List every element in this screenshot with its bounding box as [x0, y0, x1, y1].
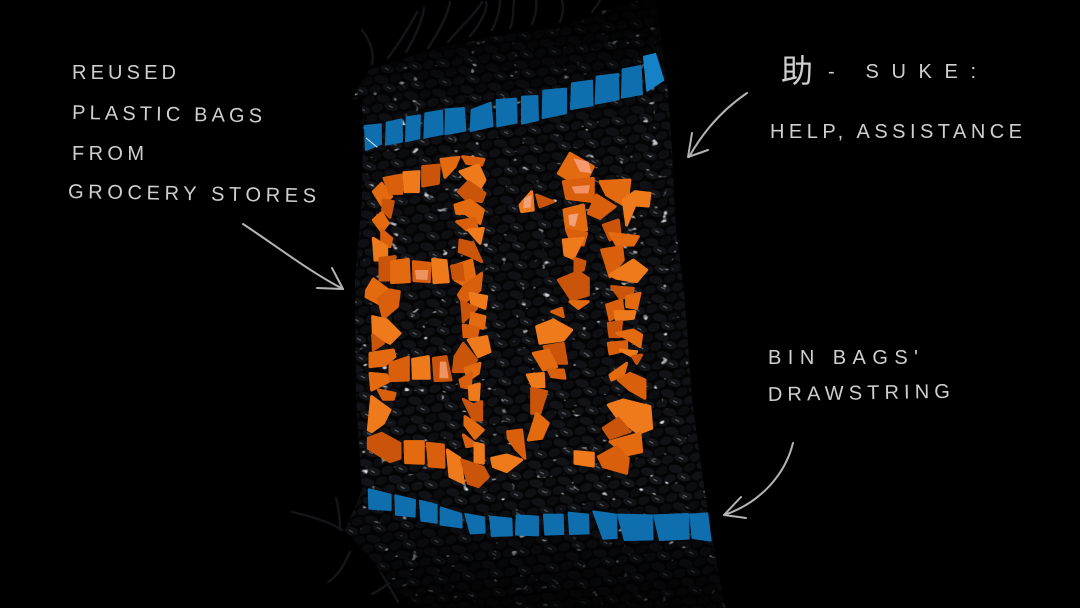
upper blue drawstring band [365, 54, 663, 150]
note: reused plastic bags: PLASTIC BAGS [72, 102, 262, 127]
note: suke meaning: - SUKE: [828, 61, 976, 83]
glossy highlights [340, 0, 740, 608]
loose warp threads [292, 0, 600, 608]
note: reused plastic bags: GROCERY STORES [68, 181, 316, 207]
note: reused plastic bags [68, 62, 316, 207]
arrow: drawstring to blue band [724, 443, 793, 518]
arrow: plastic bags to textile [243, 224, 343, 289]
note: suke meaning: HELP, ASSISTANCE [770, 121, 1022, 143]
black bag weave [345, 0, 725, 608]
arrow: suke to textile [688, 93, 747, 157]
lower blue drawstring band [369, 489, 711, 541]
note: suke meaning: 助 [781, 53, 813, 89]
note: bin bags drawstring: DRAWSTRING [768, 381, 950, 406]
note: suke meaning [770, 53, 1022, 143]
woven textile [292, 0, 740, 608]
woven orange kanji 助 [366, 153, 652, 487]
note: reused plastic bags: REUSED [72, 62, 176, 84]
note: reused plastic bags: FROM [72, 143, 144, 165]
note: bin bags drawstring: BIN BAGS' [768, 347, 918, 369]
note: bin bags drawstring [768, 347, 950, 406]
